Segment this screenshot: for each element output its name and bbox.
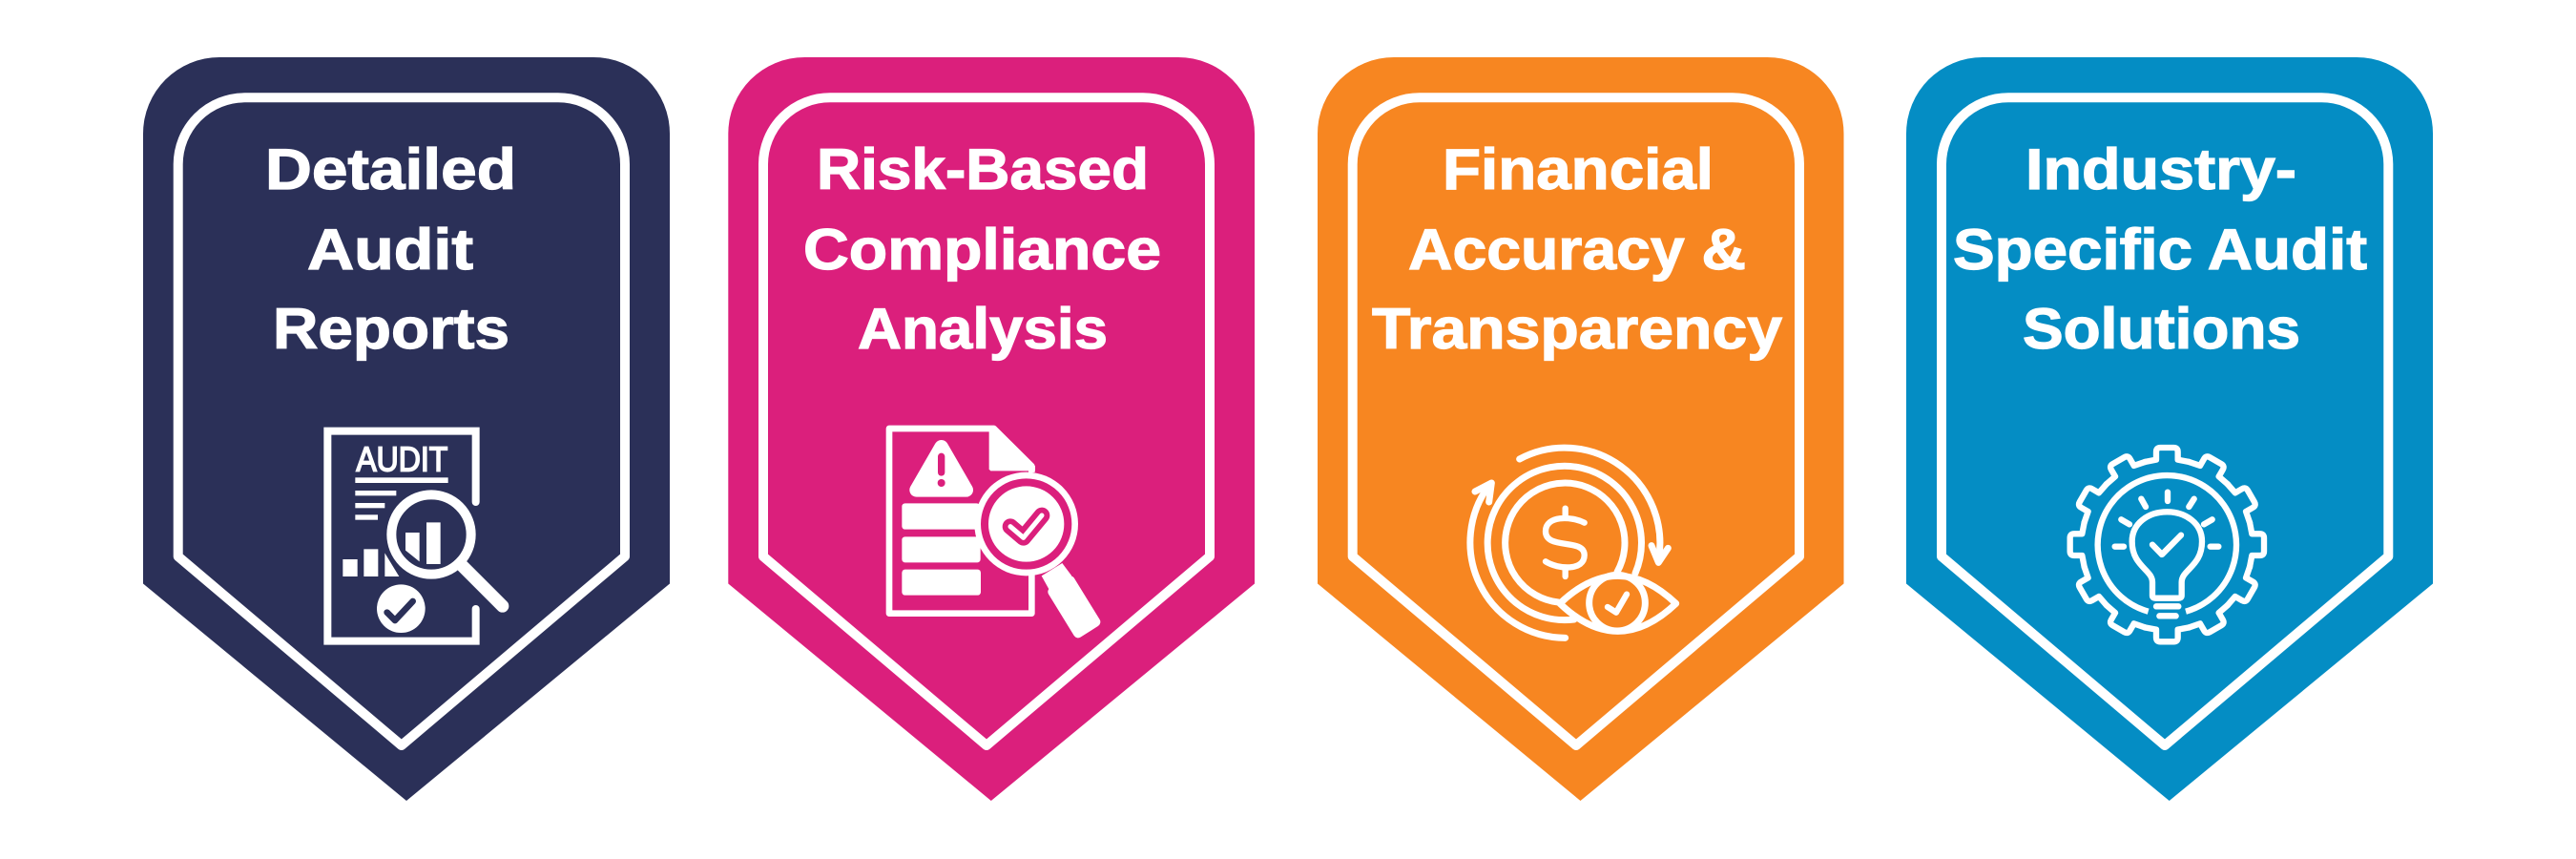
shield background navy bbox=[143, 57, 670, 801]
inner white frame bbox=[1942, 97, 2388, 745]
heading: Solutions bbox=[2023, 297, 2300, 361]
heading: Analysis bbox=[858, 297, 1108, 361]
panel: Industry-Specific Audit Solutions bbox=[1906, 57, 2433, 801]
icon: coin with cycle arrows and eye bbox=[1470, 448, 1676, 638]
heading: Industry- bbox=[2025, 137, 2296, 201]
heading bbox=[265, 137, 516, 361]
heading: Financial bbox=[1443, 137, 1714, 201]
heading: Audit bbox=[307, 218, 473, 282]
shield background orange bbox=[1318, 57, 1843, 801]
heading: Detailed bbox=[265, 137, 516, 201]
inner white frame bbox=[178, 97, 625, 745]
heading: Specific Audit bbox=[1953, 218, 2367, 282]
icon: audit document with magnifier: AUDIT bbox=[356, 439, 447, 478]
heading: Risk-Based bbox=[817, 137, 1149, 201]
inner white frame bbox=[763, 97, 1210, 745]
panel: Risk-Based Compliance Analysis bbox=[728, 57, 1255, 801]
icon: risk document with magnifier bbox=[889, 427, 1095, 633]
panel: Financial Accuracy & Transparency bbox=[1318, 57, 1843, 801]
icon: gear with lightbulb bbox=[2070, 448, 2264, 641]
panel: Detailed Audit Reports bbox=[143, 57, 670, 801]
shield background pink bbox=[728, 57, 1255, 801]
icon: audit document with magnifier bbox=[327, 431, 503, 641]
heading bbox=[1953, 137, 2367, 361]
heading: Reports bbox=[273, 297, 509, 361]
shield background blue bbox=[1906, 57, 2433, 801]
heading: Transparency bbox=[1372, 297, 1783, 361]
heading: Accuracy & bbox=[1408, 218, 1746, 282]
heading: Compliance bbox=[803, 218, 1161, 282]
inner white frame bbox=[1353, 97, 1799, 745]
heading bbox=[803, 137, 1161, 361]
heading bbox=[1372, 137, 1783, 361]
